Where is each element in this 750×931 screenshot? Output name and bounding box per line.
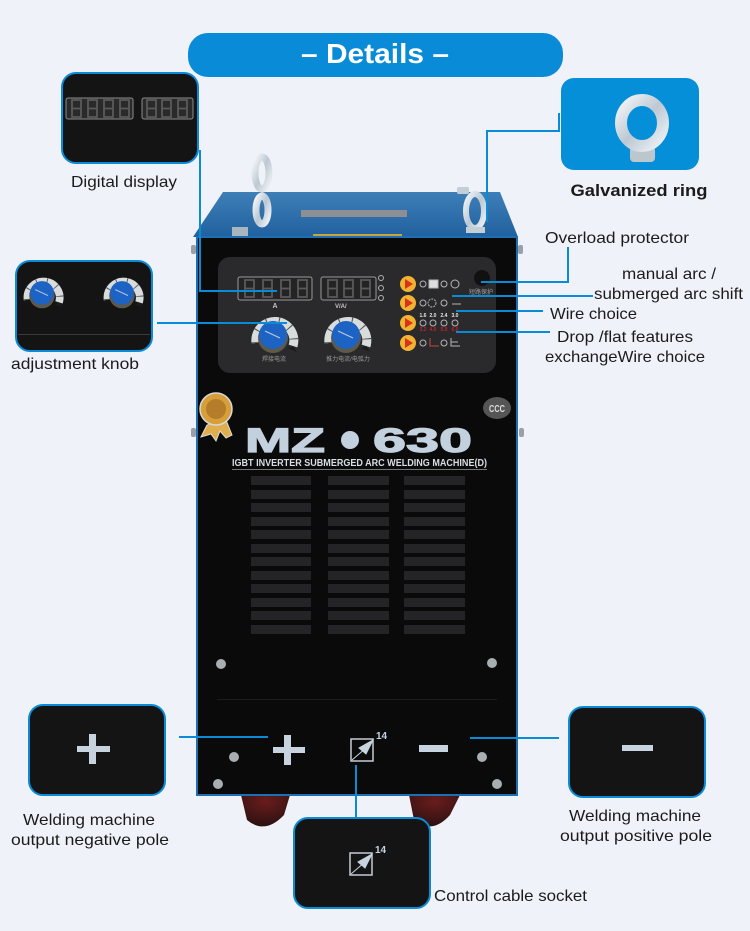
side bolts xyxy=(191,245,524,437)
machine front xyxy=(197,237,517,795)
label: adjustment knob: adjustment knob xyxy=(11,356,139,373)
callout: adjustment knob xyxy=(16,261,152,351)
label: positive pole: output positive pole xyxy=(560,828,712,845)
label: galvanized ring: Galvanized ring xyxy=(570,181,708,200)
button row icons xyxy=(420,280,461,346)
display left: A xyxy=(272,303,278,310)
label: manual arc shift: submerged arc shift xyxy=(594,286,744,303)
callout: control cable socket xyxy=(294,818,430,908)
label: control cable socket: Control cable socket xyxy=(434,888,588,905)
label: manual arc shift xyxy=(594,266,744,303)
wire size numbers: 3.2 xyxy=(420,327,427,333)
display right xyxy=(321,277,376,310)
label: negative pole: output negative pole xyxy=(11,832,169,849)
selector indicators xyxy=(378,276,384,300)
minus terminal xyxy=(419,745,448,752)
CCC mark xyxy=(483,397,511,419)
knob left xyxy=(256,321,297,353)
label: manual arc shift: manual arc / xyxy=(622,266,717,283)
wire size numbers: 2.0 xyxy=(430,313,437,319)
left lifting ring xyxy=(255,157,269,224)
label: drop / flat features xyxy=(545,329,705,366)
wire size numbers: 1.6 xyxy=(420,313,427,319)
label: drop / flat features: Drop /flat features xyxy=(557,329,693,346)
leader: digital display xyxy=(200,150,277,291)
callout: digital display xyxy=(62,73,198,163)
yellow buttons xyxy=(400,276,416,351)
model name xyxy=(245,422,472,460)
CCC mark: CCC xyxy=(489,404,505,415)
wire size numbers: 6.0 xyxy=(452,327,459,333)
wire size numbers: 3.0 xyxy=(452,313,459,319)
control panel xyxy=(218,257,496,373)
machine top xyxy=(193,192,518,237)
leader: manual arc shift xyxy=(452,295,593,297)
callout: negative pole xyxy=(29,705,165,795)
ventilation louvers xyxy=(251,476,465,634)
wire size numbers: 5.0 xyxy=(441,327,448,333)
knob labels xyxy=(262,355,370,363)
control socket terminal xyxy=(351,731,388,761)
display left xyxy=(238,277,312,310)
wheels xyxy=(241,795,460,826)
title banner xyxy=(188,33,563,77)
leader: overload protector xyxy=(481,247,568,282)
top label plate xyxy=(301,210,407,217)
plus terminal xyxy=(273,735,305,765)
label: overload protector: Overload protector xyxy=(545,230,690,247)
knob labels: 推力电流/电弧力 xyxy=(326,355,370,363)
knob right xyxy=(329,321,370,353)
leader: wire choice xyxy=(456,310,543,312)
label: wire choice: Wire choice xyxy=(550,306,637,323)
wire size numbers xyxy=(420,313,459,333)
model name: MZ xyxy=(245,422,325,460)
leader: drop / flat features xyxy=(456,331,550,333)
wire size numbers: 2.4 xyxy=(441,313,448,319)
lower panel seam xyxy=(217,699,497,700)
display right: V/A/ xyxy=(335,304,347,310)
leader: adjustment knob xyxy=(157,322,287,324)
wire size numbers: 4.0 xyxy=(430,327,437,333)
leader: control cable socket xyxy=(355,765,357,818)
right lifting ring xyxy=(457,187,485,233)
title banner: – Details – xyxy=(301,38,449,69)
label: positive pole: Welding machine xyxy=(569,808,701,825)
leader: galvanized ring xyxy=(487,113,559,222)
model subtitle: IGBT INVERTER SUBMERGED ARC WELDING MACHINE(D) xyxy=(232,458,487,469)
overload protector button: 短路保护 xyxy=(469,288,493,296)
callout: positive pole xyxy=(569,707,705,797)
label: negative pole: Welding machine xyxy=(23,812,155,829)
label: drop / flat features: exchangeWire choice xyxy=(545,349,705,366)
leader: positive pole xyxy=(470,737,559,739)
label: positive pole xyxy=(560,808,712,845)
welding machine xyxy=(191,157,524,826)
knob labels: 焊接电流 xyxy=(262,355,286,363)
screws xyxy=(213,658,502,789)
callout: galvanized ring xyxy=(561,78,699,170)
model name: 630 xyxy=(373,422,472,460)
leader: negative pole xyxy=(179,736,268,738)
overload protector button xyxy=(469,270,493,296)
label: negative pole xyxy=(11,812,169,849)
award badge xyxy=(200,393,232,441)
label: digital display: Digital display xyxy=(71,174,177,191)
